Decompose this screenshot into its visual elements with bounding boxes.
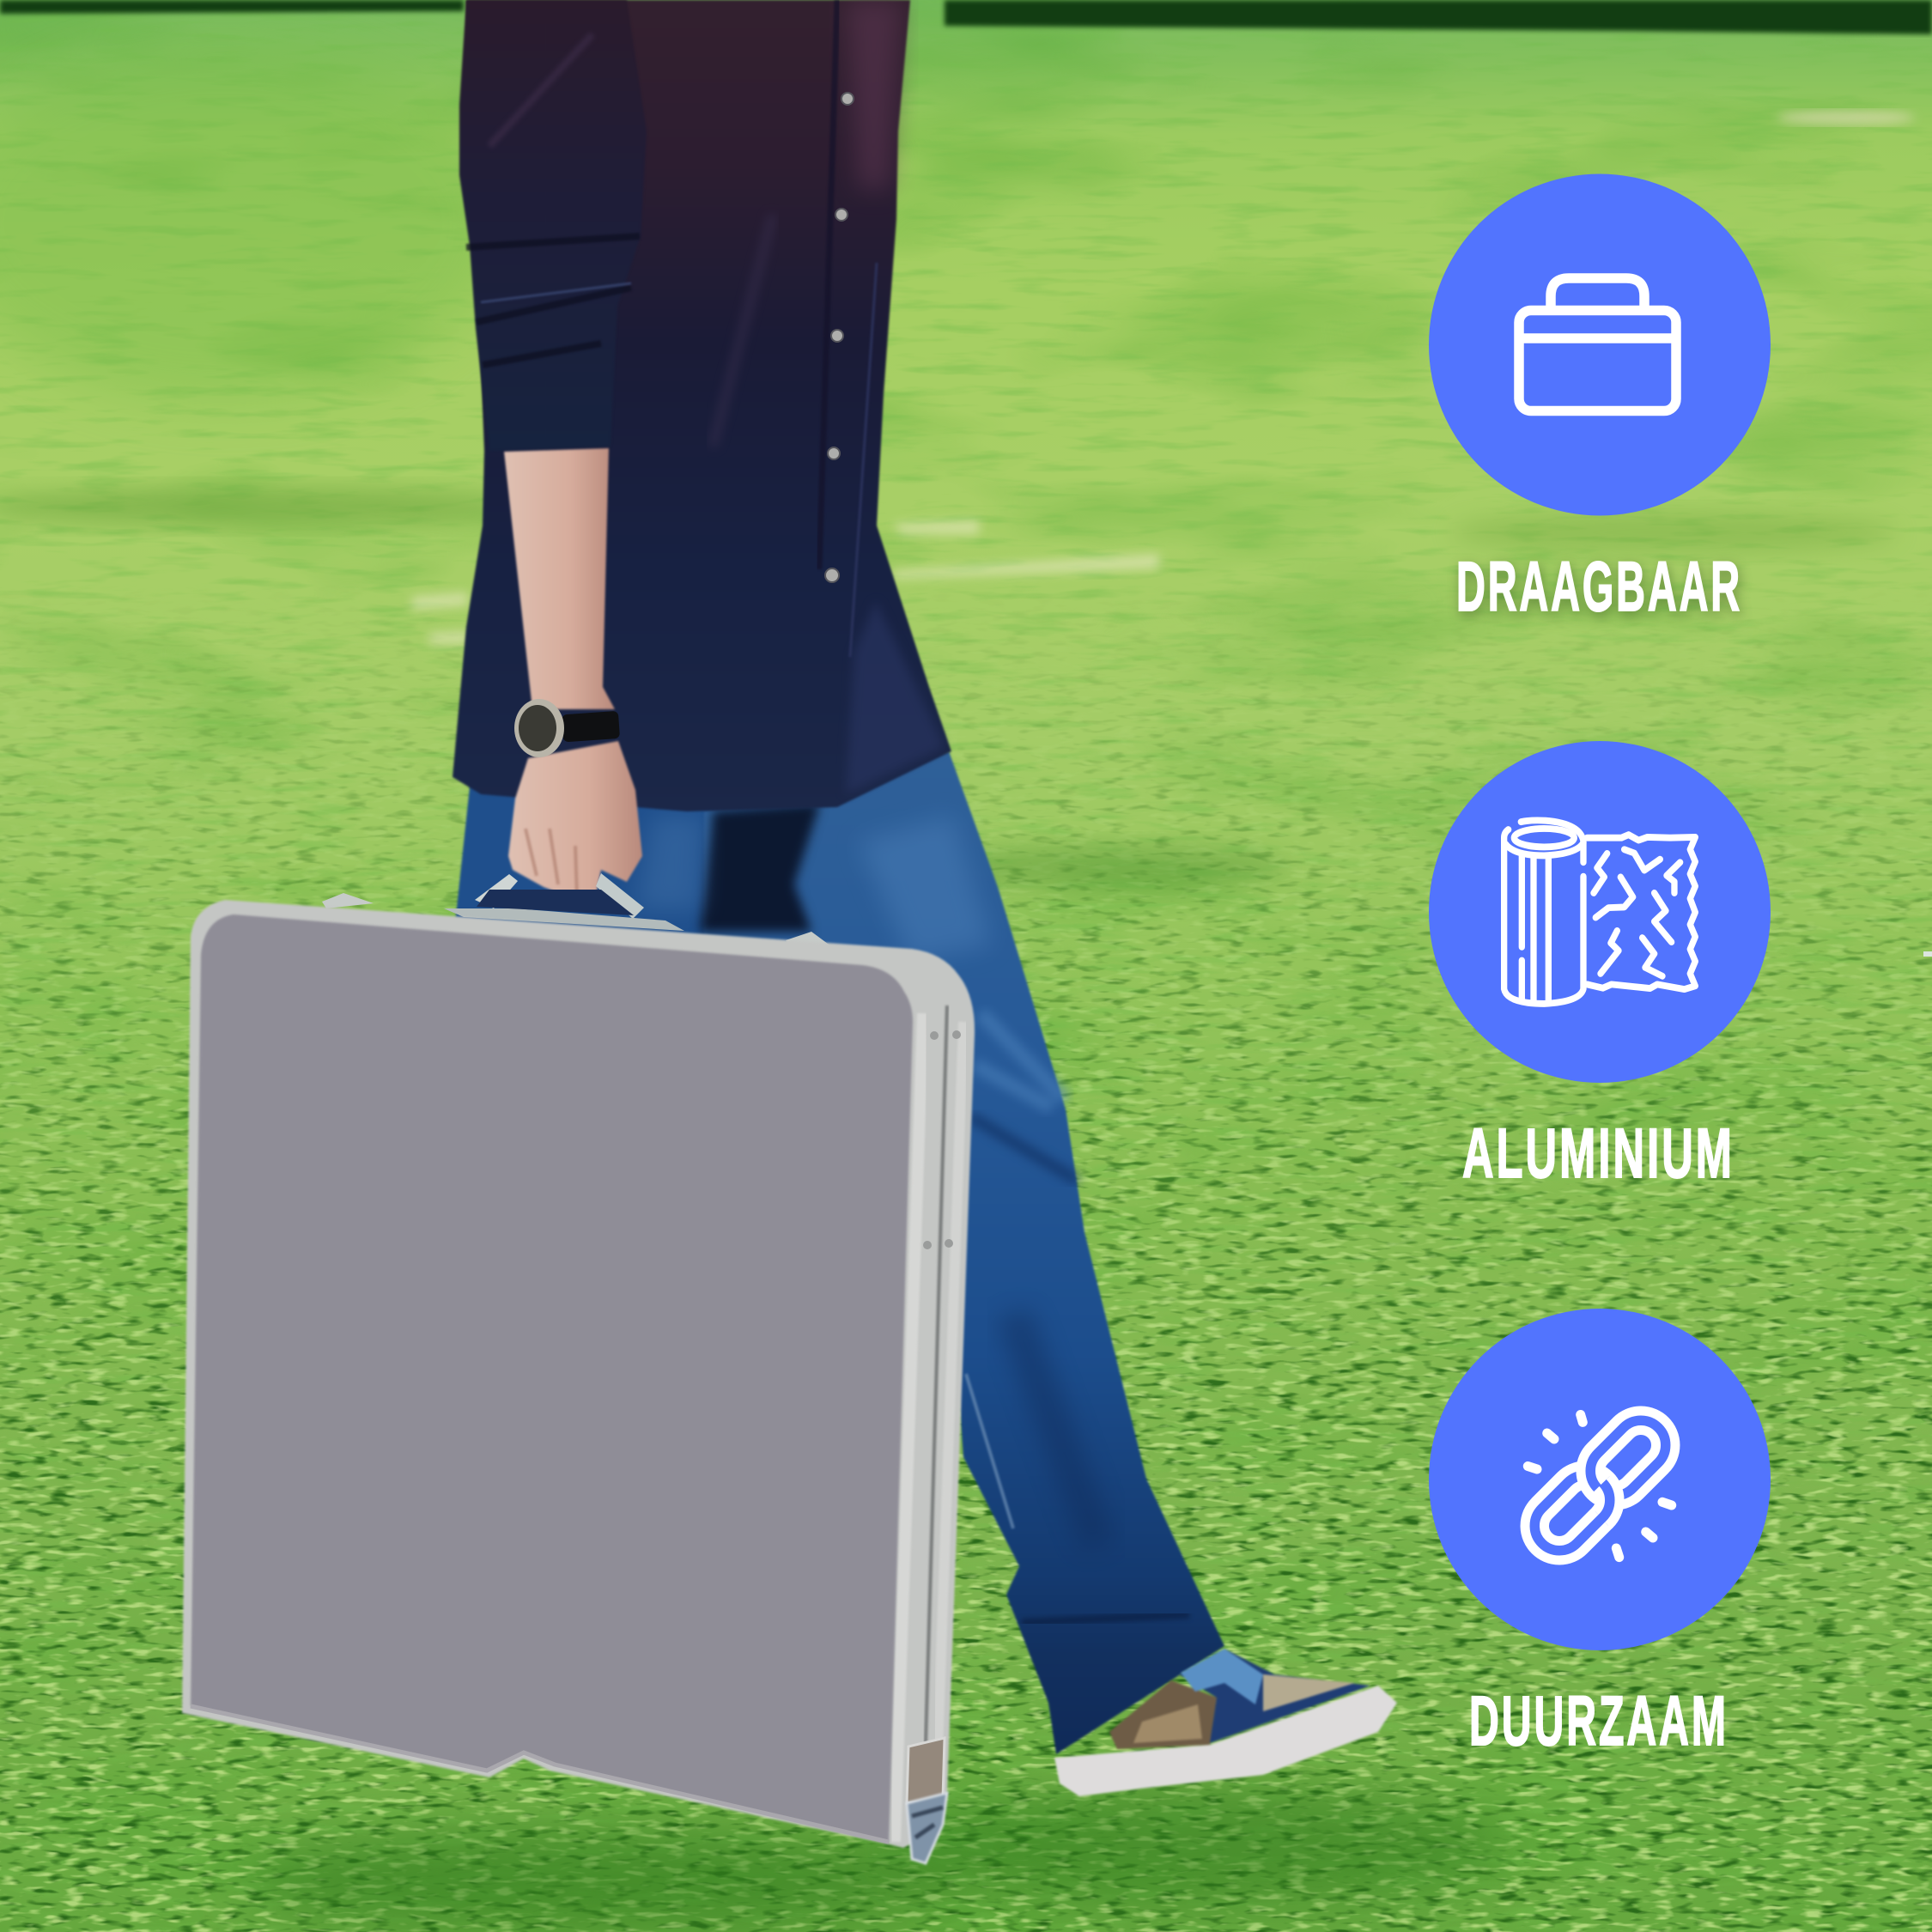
icon: aluminium foil roll	[1504, 820, 1695, 1004]
sleeve folds	[466, 236, 640, 365]
folding table	[182, 873, 975, 1863]
table frame	[182, 900, 975, 1848]
person	[453, 0, 1397, 1796]
icon: briefcase	[1519, 278, 1676, 410]
table edge strips	[895, 1013, 923, 1842]
table grey panel	[191, 914, 913, 1844]
front leg of jeans	[704, 751, 1224, 1754]
shoe	[1054, 1649, 1397, 1796]
jeans shading	[700, 803, 820, 932]
shirt buttons	[825, 93, 854, 582]
background: dark hedge at the horizon	[0, 0, 1932, 34]
icon: chain links	[1525, 1411, 1675, 1560]
feature: aluminium	[1429, 741, 1771, 1193]
watch	[514, 699, 564, 757]
table handle	[444, 873, 684, 931]
feature: duurzaam	[1429, 1309, 1771, 1760]
rivets	[923, 1030, 961, 1249]
hinge plates	[907, 1738, 945, 1803]
rolled sleeve	[459, 0, 647, 451]
watch strap	[562, 711, 620, 742]
jeans cuff stitching	[1022, 1614, 1189, 1623]
shirt body	[453, 0, 951, 811]
label: aluminium: ALUMINIUM	[1462, 1115, 1735, 1193]
back leg of jeans	[455, 747, 824, 945]
label: duurzaam: DUURZAAM	[1469, 1682, 1728, 1760]
shirt placket	[819, 0, 837, 569]
feature: draagbaar	[1429, 173, 1771, 626]
hand	[508, 741, 642, 899]
shirt highlight	[846, 0, 902, 189]
arm	[504, 448, 615, 709]
table latch	[907, 1793, 947, 1863]
hinge clips	[322, 893, 831, 946]
